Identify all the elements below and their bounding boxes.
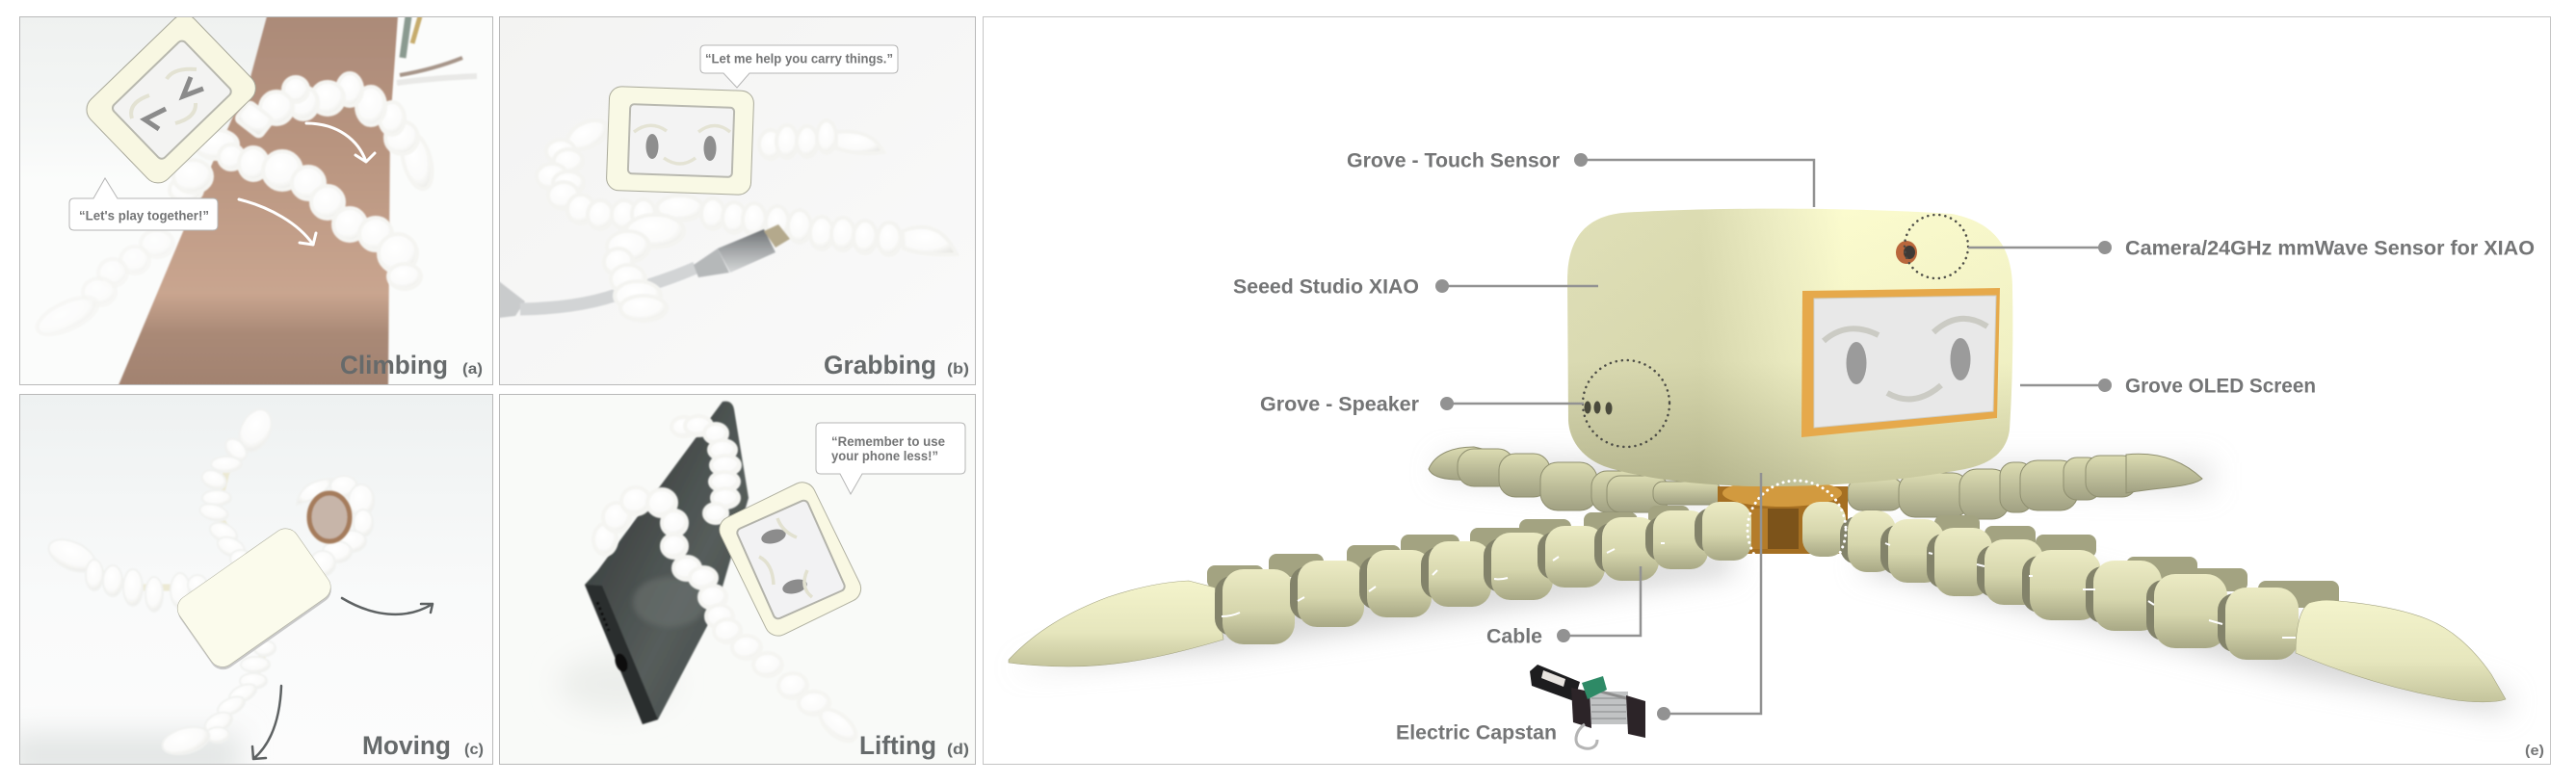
callout labels: Grove - Touch Sensor	[1347, 150, 1560, 171]
speech bubble	[700, 45, 898, 88]
speech bubble: “Let me help you carry things.”	[705, 52, 893, 65]
speech bubble	[69, 178, 218, 230]
robot legs	[541, 126, 955, 254]
label: (d)	[947, 742, 969, 758]
label: (b)	[947, 361, 969, 378]
callout labels	[1233, 150, 2535, 744]
speaker holes	[1584, 401, 1613, 414]
photo: forearm	[118, 16, 398, 385]
back right leg	[1848, 454, 2202, 519]
panel: grabbing (b)	[499, 16, 976, 385]
leg tip	[1009, 581, 1223, 666]
cable and USB-C plug	[499, 224, 790, 318]
cable dashes	[1222, 543, 2296, 638]
speech bubble: “Remember to use	[831, 434, 945, 449]
callout labels: Camera/24GHz mmWave Sensor for XIAO	[2125, 237, 2535, 260]
ring	[309, 493, 350, 541]
callout labels: Electric Capstan	[1396, 722, 1557, 744]
electric capstan mount	[1718, 480, 1848, 554]
face	[1824, 319, 1987, 399]
speech bubble: “Let's play together!”	[79, 208, 209, 223]
label	[861, 736, 969, 759]
phone	[585, 402, 749, 724]
robot body	[1567, 209, 2012, 486]
callout labels: Grove - Speaker	[1260, 393, 1419, 416]
arrows: motion	[252, 598, 433, 759]
callout labels: Cable	[1486, 626, 1542, 647]
robot leg gripping cable	[613, 214, 671, 306]
label	[341, 354, 482, 379]
ground shadows	[1012, 457, 2510, 713]
robot legs wrapped around arm	[93, 70, 434, 308]
leg knuckles	[1207, 506, 1690, 588]
electric capstan image	[1519, 662, 1656, 753]
leg links	[143, 472, 266, 659]
label: (a)	[462, 361, 483, 378]
front right leg	[1802, 502, 2506, 702]
arrows: motion	[239, 123, 375, 245]
panel: lifting (d)	[499, 394, 976, 765]
panel: hardware overview (e)	[983, 17, 2551, 765]
label: Moving	[362, 731, 451, 760]
panel: moving (c)	[10, 394, 493, 780]
oled screen	[1801, 288, 2000, 437]
robot head	[87, 17, 256, 183]
label	[364, 736, 484, 759]
camera sensor	[1896, 241, 1917, 264]
callout dots	[1435, 153, 2112, 720]
robot legs	[44, 405, 374, 759]
robot legs	[607, 418, 743, 626]
panel: climbing (a)	[19, 9, 493, 385]
bracelet on wrist	[397, 16, 477, 83]
speech bubble: your phone less!”	[831, 449, 938, 463]
leg segments	[1215, 502, 1751, 644]
robot body	[177, 528, 331, 670]
callout labels: Seeed Studio XIAO	[1233, 275, 1419, 299]
leg tip	[2296, 600, 2506, 702]
label: Lifting	[859, 731, 936, 760]
robot head	[715, 478, 865, 640]
robot head	[606, 86, 754, 196]
label: Climbing	[340, 351, 448, 379]
label: Grabbing	[824, 351, 936, 379]
front left leg	[1009, 502, 1751, 666]
label: (c)	[464, 742, 484, 758]
label	[825, 354, 969, 379]
dotted highlight circles	[1583, 215, 1968, 579]
callout leader lines	[1442, 160, 2105, 714]
callout labels: Grove OLED Screen	[2125, 376, 2316, 397]
back left leg	[1429, 447, 1721, 512]
speech bubble	[816, 423, 965, 494]
panel letter: (e)	[2525, 743, 2544, 759]
